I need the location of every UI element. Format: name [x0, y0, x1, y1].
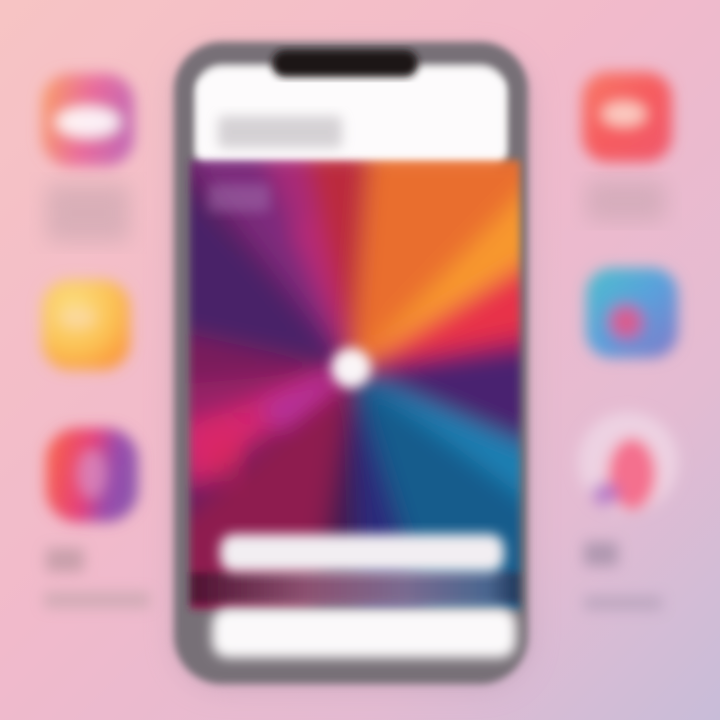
- app icon left 2: [42, 280, 130, 370]
- screen artwork: colour rays: [170, 150, 540, 620]
- app icon right 1: [582, 72, 672, 162]
- magenta ray highlight: [258, 372, 345, 432]
- phone body: [174, 42, 528, 684]
- search pill: [220, 534, 504, 572]
- phone notch: [272, 50, 418, 77]
- app icon right 3: [578, 412, 678, 512]
- app icon left 1: [42, 74, 134, 166]
- label right 3: [584, 542, 662, 610]
- bottom panel: [212, 608, 516, 658]
- phone shadow: [172, 50, 532, 690]
- red ray glow: [206, 429, 238, 481]
- label left 3: [44, 548, 150, 608]
- label right 1: [586, 180, 666, 222]
- label left 1: [46, 184, 130, 242]
- app icon right 2: [586, 268, 678, 358]
- artwork label: [208, 184, 270, 212]
- centre glow: [331, 348, 371, 388]
- header white fade: [200, 82, 502, 154]
- app icon left 3: [46, 428, 138, 522]
- header text placeholder: [218, 116, 342, 148]
- lower dark strip: [190, 572, 520, 604]
